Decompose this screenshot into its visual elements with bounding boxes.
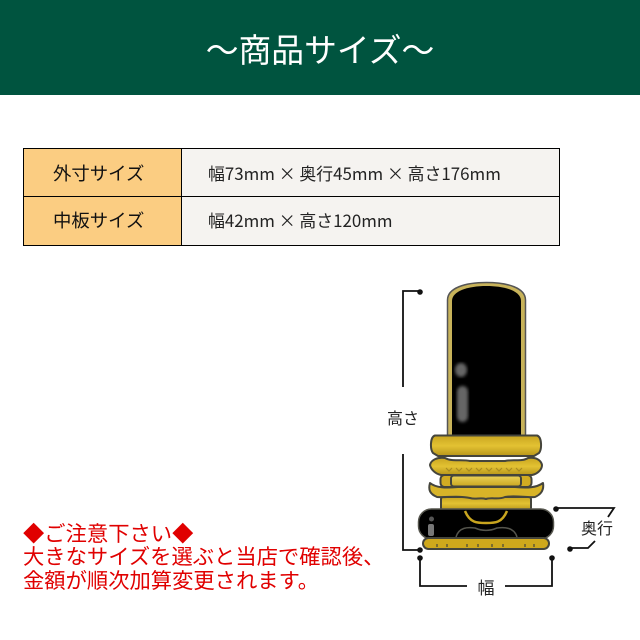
notice text: ◆ご注意下さい◆ (23, 517, 193, 548)
header banner (0, 0, 640, 95)
label: width: 幅 (478, 574, 494, 599)
label: depth: 奥行 (581, 515, 613, 539)
row label: inner board size: 中板サイズ (53, 207, 144, 233)
row label: outer size (23, 148, 182, 197)
row value: inner board size: 幅42mm × 高さ120mm (208, 207, 393, 232)
row value: outer size (181, 148, 560, 197)
title: 〜商品サイズ〜 (206, 25, 434, 72)
icon: tablet pedestal (429, 436, 543, 510)
icon: tablet body (448, 282, 526, 436)
row label: inner board size (23, 196, 182, 246)
notice text: 金額が順次加算変更されます。 (23, 564, 319, 595)
row value: outer size: 幅73mm × 奥行45mm × 高さ176mm (208, 160, 501, 185)
dimension: depth (553, 506, 614, 552)
row value: inner board size (181, 196, 560, 246)
label: height: 高さ (387, 405, 419, 429)
dimension: height (403, 289, 423, 553)
notice text: 大きなサイズを選ぶと当店で確認後、 (23, 540, 384, 571)
dimension: width (417, 555, 555, 586)
decorative pattern on pedestal (446, 468, 522, 471)
row label: outer size: 外寸サイズ (53, 160, 144, 186)
notice text (23, 517, 384, 595)
size table (23, 148, 560, 246)
icon: black base and gold plinth (418, 509, 554, 549)
